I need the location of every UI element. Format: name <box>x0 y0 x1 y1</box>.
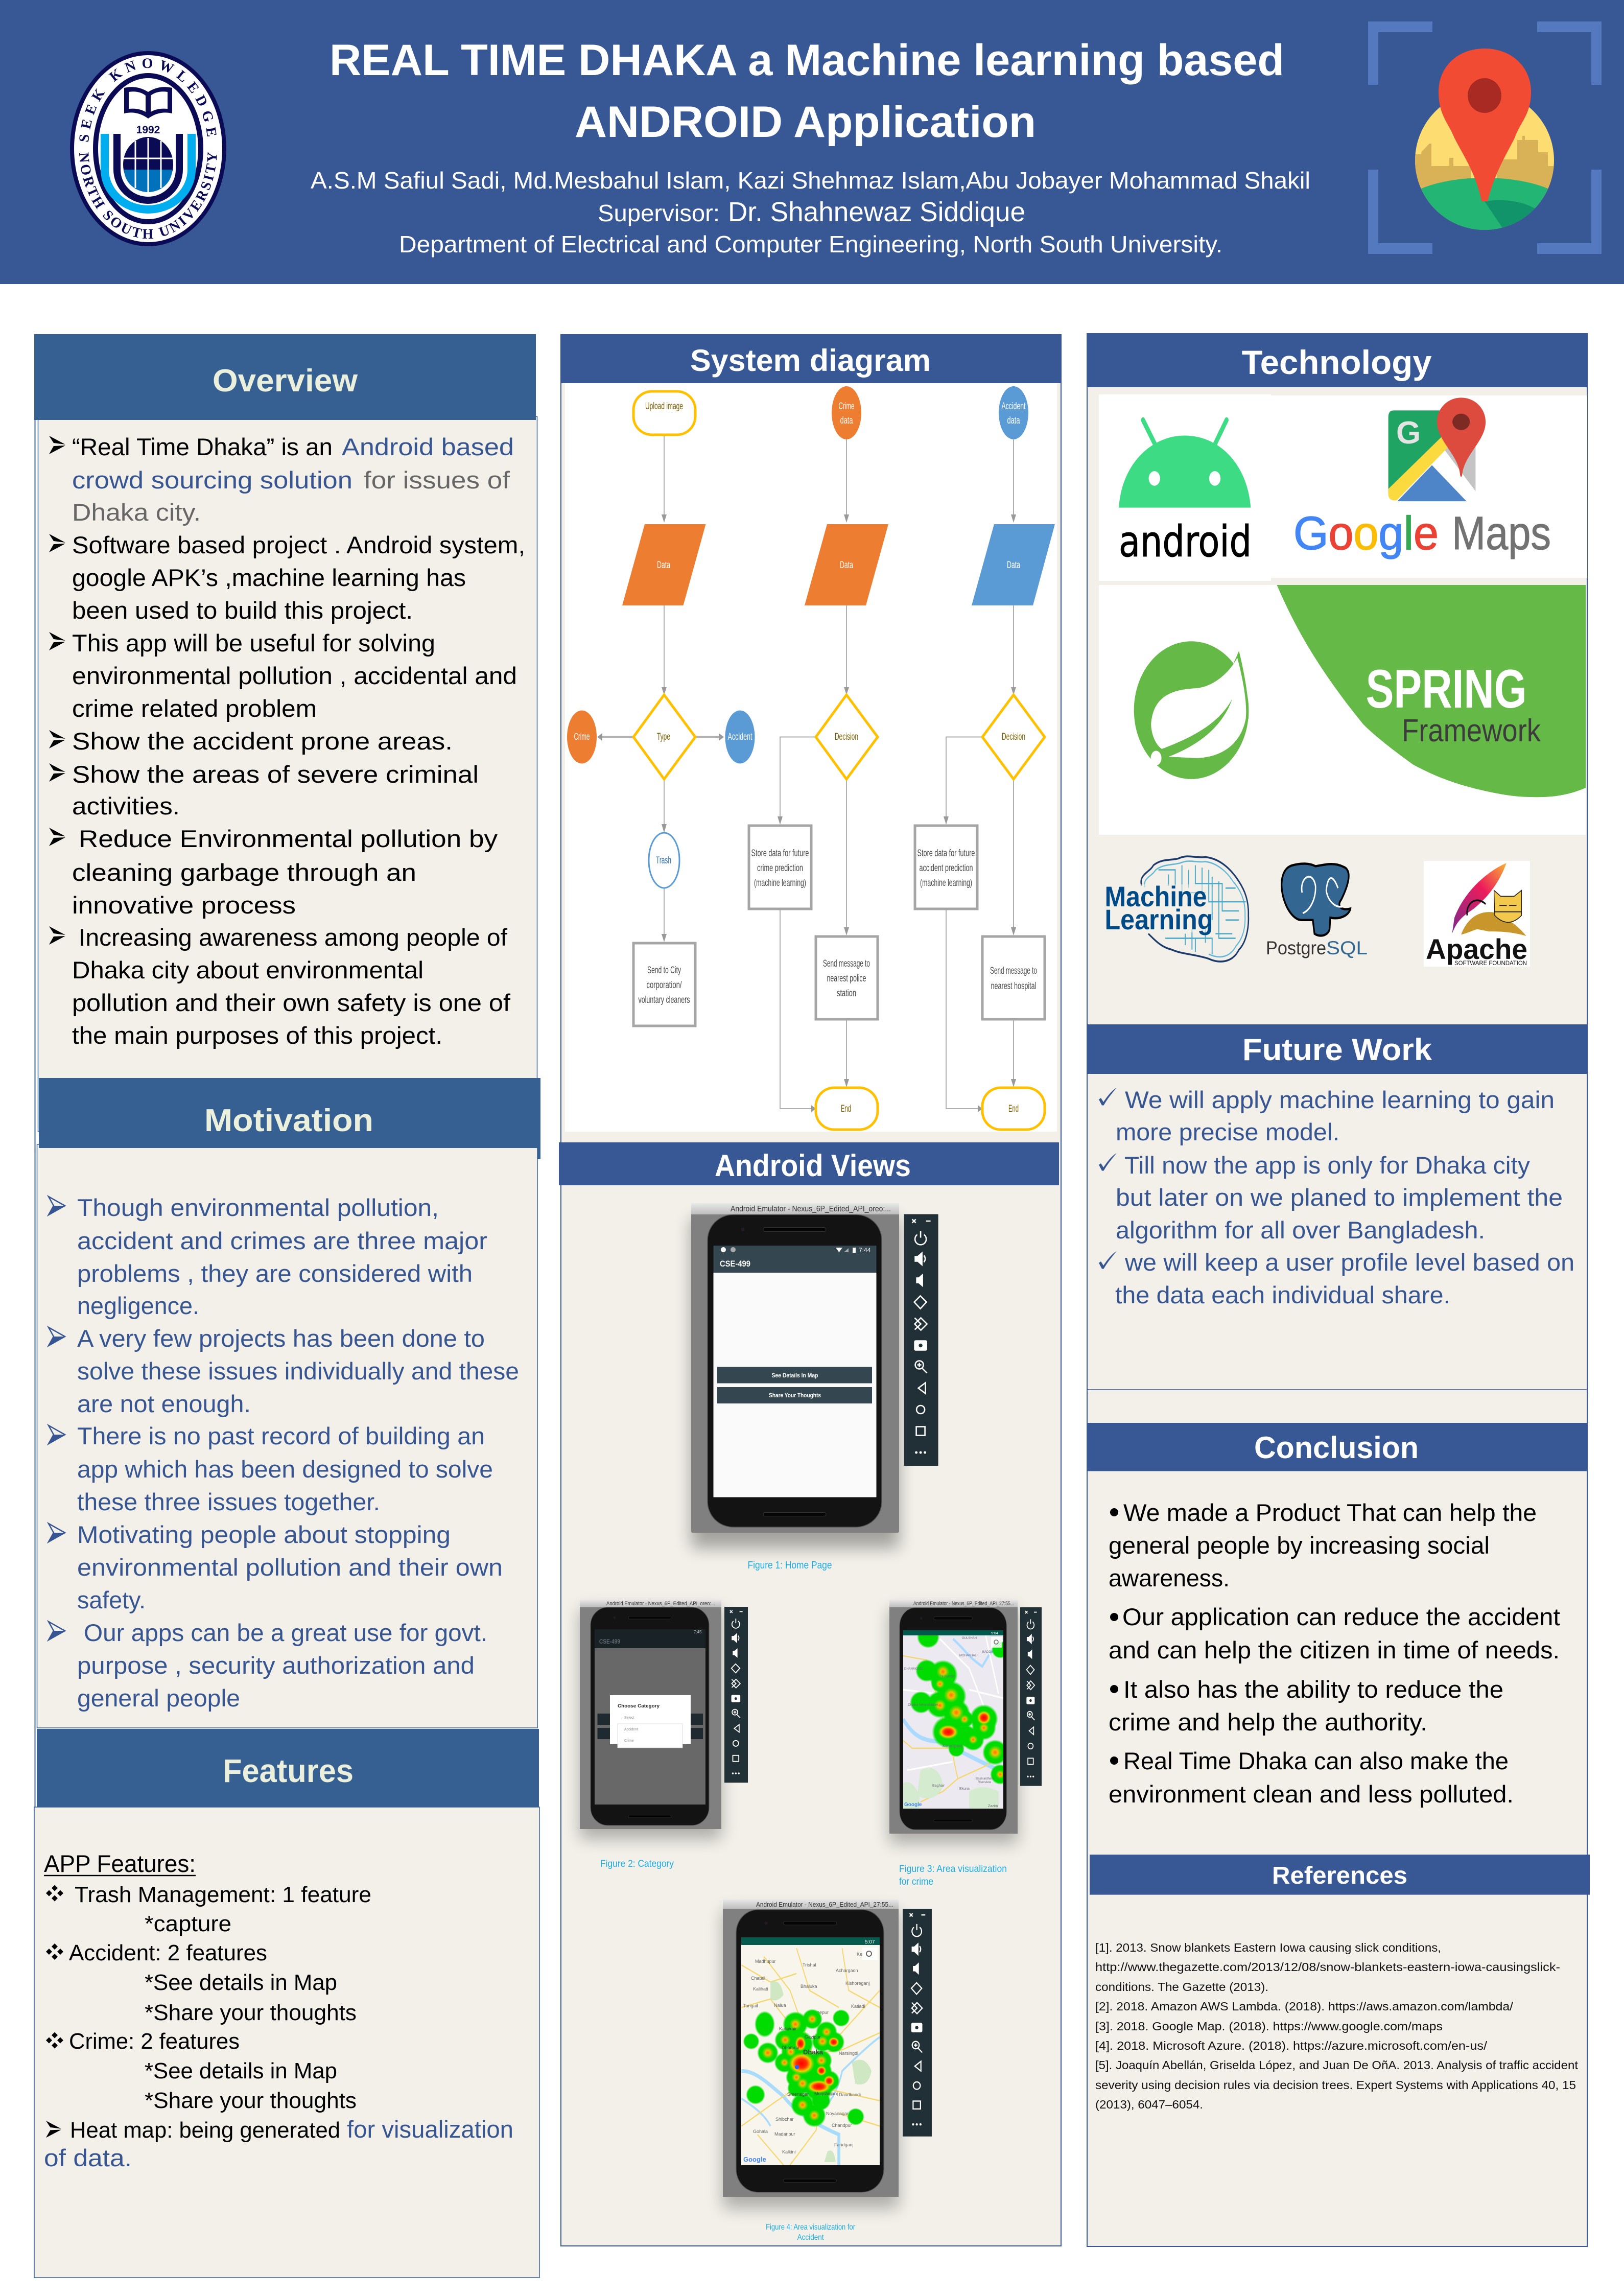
reference list: http://www.thegazette.com/2013/12/08/snow-blankets-eastern-iowa-causingslick- <box>1095 1960 1560 1974</box>
features list: Accident: 2 features <box>69 1940 267 1965</box>
logo: google maps <box>1271 395 1587 578</box>
flowchart process boxes: Send message to <box>823 958 870 969</box>
map: crime heat blobs: Baghair <box>932 1784 945 1788</box>
motivation bullet list: purpose , security authorization and <box>77 1652 475 1679</box>
flowchart node: accident: Accident <box>727 732 752 742</box>
future work list: the data each individual share. <box>1115 1281 1450 1308</box>
logo: google maps: G <box>1396 415 1421 451</box>
map: accident heat blobs: Trishal <box>803 1962 816 1967</box>
logo: google maps: Google <box>1293 507 1439 559</box>
logo: spring framework <box>1099 585 1586 835</box>
screenshot: home page: CSE-499 <box>720 1259 750 1269</box>
flowchart decisions: Type <box>657 732 670 742</box>
panel: overview <box>34 334 537 1807</box>
flowchart data nodes: Data <box>657 560 670 571</box>
reference list: [3]. 2018. Google Map. (2018). https://www.google.com/maps <box>1095 2020 1443 2033</box>
screenshot: home page: Share Your Thoughts <box>769 1392 821 1399</box>
map: crime heat blobs: Riverview <box>978 1781 992 1784</box>
icon: city map pin <box>1368 21 1602 254</box>
reference list: severity using decision rules via decision trees. Expert Systems with Applications 40, 15 <box>1095 2078 1576 2092</box>
heading: overview: Overview <box>213 363 358 399</box>
future work list: algorithm for all over Bangladesh. <box>1116 1216 1485 1244</box>
overview bullet list: activities. <box>72 792 180 819</box>
flowchart end nodes <box>816 1088 1045 1130</box>
features list: *See details in Map <box>145 1970 337 1995</box>
map: accident heat blobs: Tangail <box>743 2003 758 2008</box>
map: accident heat blobs: Munshiganj <box>814 2091 838 2096</box>
flowchart decisions <box>633 695 1045 779</box>
flowchart data nodes: Data <box>840 560 853 571</box>
logo: apache: Apache <box>1426 933 1527 965</box>
logo: postgresql: SQL <box>1326 938 1368 958</box>
motivation bullet list: solve these issues individually and these <box>77 1357 519 1385</box>
map: crime heat blobs: GULSHAN <box>962 1637 977 1640</box>
overview bullet list: Android based <box>342 433 514 460</box>
heading: future work: Future Work <box>1242 1033 1432 1067</box>
screenshot: category dialog: 7:45 <box>694 1630 702 1634</box>
title <box>329 36 1284 147</box>
flowchart data nodes: Data <box>1007 560 1020 571</box>
panel: references <box>1090 1855 1590 2111</box>
map: accident heat blobs: Katiadi <box>851 2004 865 2009</box>
motivation bullet list: There is no past record of building an <box>77 1422 485 1449</box>
map: crime heat blobs: BADDA <box>982 1651 993 1654</box>
map: accident heat blobs: Narsingdi <box>839 2051 858 2056</box>
flowchart node: crime <box>567 710 597 763</box>
conclusion text: It also has the ability to reduce the <box>1123 1676 1503 1703</box>
title: REAL TIME DHAKA a Machine learning based <box>329 36 1284 85</box>
authors and affiliation: Dr. Shahnewaz Siddique <box>728 197 1025 227</box>
features list: Trash Management: 1 feature <box>75 1882 371 1907</box>
overview bullet list: been used to build this project. <box>72 597 413 624</box>
logo: machine learning: Learning <box>1104 903 1213 935</box>
map: crime heat blobs: Google <box>904 1802 922 1808</box>
flowchart process boxes: nearest hospital <box>991 981 1036 992</box>
icon: university seal <box>70 51 226 246</box>
motivation bullet list: Though environmental pollution, <box>77 1194 439 1221</box>
motivation bullet list <box>49 1194 519 1712</box>
overview bullet list: Increasing awareness among people of <box>79 924 508 951</box>
features list: *Share your thoughts <box>145 2088 357 2113</box>
flowchart process boxes: (machine learning) <box>920 878 972 888</box>
screenshot: crime heat map <box>889 1600 1042 1843</box>
features list: for visualization <box>347 2116 513 2143</box>
future work list: we will keep a user profile level based on <box>1124 1249 1574 1276</box>
flowchart process boxes: Store data for future <box>917 848 975 859</box>
map: accident heat blobs: Gohala <box>753 2129 768 2134</box>
conclusion text: Our application can reduce the accident <box>1122 1603 1560 1630</box>
screenshot: home page <box>691 1203 938 1548</box>
map: accident heat blobs: Faridganj <box>834 2142 854 2147</box>
map: crime heat blobs: TEJGAON <box>940 1675 954 1678</box>
map: accident heat blobs: Sreepur <box>812 2010 829 2015</box>
conclusion text: We made a Product That can help the <box>1123 1499 1537 1526</box>
overview bullet list: crime related problem <box>72 695 317 722</box>
future work list: more precise model. <box>1116 1118 1339 1145</box>
screenshot: category dialog: Accident <box>624 1728 638 1731</box>
caption: figure 2: Figure 2: Category <box>600 1859 674 1869</box>
screenshot: accident heat map: Android Emulator - Nexus_6P_Edited_API_27:55... <box>756 1901 893 1908</box>
screenshot: category dialog: Crime <box>624 1739 634 1743</box>
flowchart process boxes: accident prediction <box>920 863 973 874</box>
panel: technology <box>1087 334 1587 2246</box>
heading: features: Features <box>223 1752 354 1789</box>
screenshot: category dialog: Android Emulator - Nexus_6P_Edited_API_oreo:... <box>606 1601 715 1607</box>
future work list: We will apply machine learning to gain <box>1125 1086 1555 1113</box>
panel: android views <box>559 1142 1059 2242</box>
flowchart process boxes: (machine learning) <box>754 878 806 888</box>
panel: system diagram <box>561 335 1061 2246</box>
reference list: [4]. 2018. Microsoft Azure. (2018). https://azure.microsoft.com/en-us/ <box>1095 2039 1488 2052</box>
heading: conclusion: Conclusion <box>1254 1431 1419 1465</box>
motivation bullet list: these three issues together. <box>77 1488 380 1515</box>
screenshot: accident heat map <box>723 1900 932 2208</box>
overview bullet list: cleaning garbage through an <box>72 859 416 886</box>
flowchart node: accident data: data <box>1007 415 1020 426</box>
authors and affiliation: Department of Electrical and Computer Engineering, North South University. <box>399 231 1222 257</box>
map: accident heat blobs: Nalua <box>774 2003 786 2008</box>
map: accident heat blobs: 5:07 <box>865 1939 875 1945</box>
map: accident heat blobs: Chandpur <box>832 2123 852 2128</box>
flowchart node: accident <box>725 710 755 763</box>
map: accident heat blobs: Daudkandi <box>839 2092 861 2097</box>
icon: university seal: SEEK KNOWLEDGE <box>79 58 217 142</box>
caption: figure 1: Figure 1: Home Page <box>748 1560 832 1571</box>
screenshot: home page: Android Emulator - Nexus_6P_Edited_API_oreo:... <box>731 1205 891 1213</box>
flowchart node: crime: Crime <box>574 732 590 742</box>
flowchart <box>565 383 1057 1132</box>
caption: figure 3: for crime <box>899 1877 933 1887</box>
header banner <box>0 0 1624 284</box>
map: accident heat blobs <box>741 1937 880 2165</box>
motivation bullet list: app which has been designed to solve <box>77 1456 493 1483</box>
reference list: [2]. 2018. Amazon AWS Lambda. (2018). https://aws.amazon.com/lambda/ <box>1095 2000 1514 2013</box>
heading: android views: Android Views <box>715 1149 911 1183</box>
caption: figure 4 <box>766 2223 856 2242</box>
overview bullet list: google APK’s ,machine learning has <box>72 564 466 591</box>
caption: figure 3 <box>899 1864 1007 1887</box>
map: accident heat blobs: Kaliakair <box>779 2026 797 2031</box>
reference list: (2013), 6047–6054. <box>1095 2098 1203 2111</box>
flowchart process boxes: voluntary cleaners <box>639 995 690 1005</box>
map: crime heat blobs: Bashundhara <box>976 1777 994 1780</box>
motivation bullet list: are not enough. <box>77 1390 251 1417</box>
heading: motivation: Motivation <box>204 1103 373 1138</box>
overview bullet list: Show the accident prone areas. <box>72 728 453 755</box>
heading: technology: Technology <box>1242 343 1432 381</box>
flowchart decisions: Decision <box>1002 732 1025 742</box>
overview bullet list: Dhaka city. <box>72 499 201 526</box>
overview bullet list: Reduce Environmental pollution by <box>79 825 498 852</box>
logo: android: android <box>1119 517 1252 567</box>
motivation bullet list: negligence. <box>77 1292 199 1319</box>
overview bullet list: “Real Time Dhaka” is an <box>72 433 333 460</box>
map: accident heat blobs: Noyanagar <box>826 2111 849 2116</box>
panel: features <box>34 1729 539 2278</box>
flowchart node: trash: Trash <box>656 855 671 866</box>
logo: spring framework: SPRING <box>1366 658 1527 719</box>
authors and affiliation: Supervisor: <box>598 200 720 226</box>
panel: conclusion <box>1087 1423 1587 1808</box>
motivation bullet list: environmental pollution and their own <box>77 1554 503 1581</box>
icon: university seal: NORTH SOUTH UNIVERSITY <box>79 152 217 239</box>
flowchart node: upload image <box>633 391 695 435</box>
conclusion text: general people by increasing social <box>1109 1532 1490 1559</box>
flowchart process boxes: Send to City <box>647 965 681 976</box>
flowchart process boxes: Store data for future <box>751 848 809 859</box>
overview bullet list: crowd sourcing solution <box>72 466 352 494</box>
screenshot: category dialog: Choose Category <box>618 1703 660 1708</box>
map: crime heat blobs: 5:04 <box>991 1632 998 1635</box>
screenshot: home page: See Details In Map <box>771 1372 818 1379</box>
motivation bullet list: accident and crimes are three major <box>77 1227 487 1254</box>
flowchart process boxes: crime prediction <box>757 863 803 874</box>
caption: figure 3: Figure 3: Area visualization <box>899 1864 1007 1875</box>
screenshot: category dialog: Select <box>624 1716 634 1720</box>
map: crime heat blobs: Dhaka New Market <box>908 1703 938 1707</box>
flowchart node: crime data <box>832 386 861 439</box>
motivation bullet list: Motivating people about stopping <box>77 1521 451 1548</box>
features list <box>44 1850 513 2171</box>
screenshot: home page: 7:44 <box>859 1247 871 1254</box>
reference list: [5]. Joaquín Abellán, Griselda López, and Juan De OñA. 2013. Analysis of traffic accident <box>1095 2058 1579 2072</box>
map: accident heat blobs: Dhamrai <box>782 2045 799 2050</box>
heading: references: References <box>1272 1862 1407 1889</box>
map: accident heat blobs: Ker <box>857 1952 864 1957</box>
flowchart decisions: Decision <box>835 732 858 742</box>
overview bullet list: This app will be useful for solving <box>72 629 435 657</box>
motivation bullet list: safety. <box>77 1586 146 1613</box>
motivation bullet list: general people <box>77 1684 240 1712</box>
reference list <box>1095 1941 1579 2111</box>
map: accident heat blobs: Bhaluka <box>801 1984 817 1989</box>
map: crime heat blobs: Keraniganj <box>943 1744 962 1748</box>
panel: future work <box>1087 1024 1587 1390</box>
motivation bullet list: A very few projects has been done to <box>77 1325 485 1352</box>
map: accident heat blobs: Sreenagar <box>787 2092 809 2097</box>
future work list <box>1099 1086 1574 1308</box>
map: accident heat blobs: Chatail <box>751 1976 765 1981</box>
screenshot: category dialog <box>580 1600 748 1839</box>
flowchart data nodes <box>622 524 1055 605</box>
overview bullet list: Software based project . Android system, <box>72 531 525 558</box>
conclusion text: crime and help the authority. <box>1109 1708 1427 1736</box>
authors and affiliation <box>311 167 1310 257</box>
flowchart process boxes <box>633 826 1045 1026</box>
map: accident heat blobs: Madaripur <box>774 2131 795 2137</box>
title: ANDROID Application <box>575 98 1036 147</box>
caption: figure 4: Figure 4: Area visualization for <box>766 2223 856 2232</box>
map: crime heat blobs: Ekuria <box>959 1787 970 1791</box>
motivation bullet list: Our apps can be a great use for govt. <box>84 1619 487 1646</box>
map: accident heat blobs: Achargaon <box>836 1968 858 1973</box>
logo: postgresql: Postgre <box>1266 938 1326 958</box>
panel: motivation <box>37 1078 540 1728</box>
future work list: Till now the app is only for Dhaka city <box>1124 1152 1531 1179</box>
logo: machine learning <box>1102 856 1249 962</box>
overview bullet list: for issues of <box>364 466 510 494</box>
authors and affiliation: A.S.M Safiul Sadi, Md.Mesbahul Islam, Kazi Shehmaz Islam,Abu Jobayer Mohammad Shakil <box>311 167 1310 194</box>
flowchart process boxes: Send message to <box>990 966 1037 976</box>
icon: university seal: 1992 <box>136 124 160 136</box>
logo: android <box>1099 394 1271 581</box>
conclusion text: awareness. <box>1109 1564 1230 1591</box>
overview bullet list: pollution and their own safety is one of <box>72 989 511 1016</box>
features list: *Share your thoughts <box>145 2000 357 2025</box>
overview bullet list: environmental pollution , accidental and <box>72 662 517 689</box>
logo: apache <box>1424 861 1530 967</box>
conclusion text: and can help the citizen in time of needs. <box>1109 1636 1560 1664</box>
overview bullet list: innovative process <box>72 892 296 919</box>
logo: machine learning: Machine <box>1104 880 1207 912</box>
map: crime heat blobs: MOHAKHALI <box>959 1654 978 1657</box>
flowchart node: upload image: Upload image <box>645 401 683 412</box>
features list: *See details in Map <box>145 2058 337 2083</box>
features list: Crime: 2 features <box>69 2029 240 2054</box>
heading: system diagram: System diagram <box>690 343 931 378</box>
map: crime heat blobs: DHANMONDI <box>904 1668 923 1671</box>
motivation bullet list: problems , they are considered with <box>77 1260 473 1287</box>
map: accident heat blobs: Dhaka <box>803 2048 823 2056</box>
future work list: but later on we planed to implement the <box>1116 1184 1563 1211</box>
logo: apache: SOFTWARE FOUNDATION <box>1454 959 1527 967</box>
flowchart node: accident data: Accident <box>1001 401 1026 412</box>
flowchart node: trash <box>649 833 679 888</box>
map: crime heat blobs: Zazira <box>988 1805 998 1808</box>
conclusion text: Real Time Dhaka can also make the <box>1123 1747 1509 1774</box>
flowchart process boxes: station <box>837 988 856 999</box>
map: accident heat blobs: Gazipur <box>805 2034 821 2040</box>
flowchart node: crime data: data <box>840 415 853 426</box>
overview bullet list: the main purposes of this project. <box>72 1022 442 1049</box>
conclusion text <box>1109 1499 1560 1808</box>
reference list: conditions. The Gazette (2013). <box>1095 1980 1268 1994</box>
map: accident heat blobs: Shibchar <box>775 2117 794 2122</box>
features list: *capture <box>145 1911 231 1936</box>
map: accident heat blobs: Kalihati <box>753 1986 768 1992</box>
map: accident heat blobs: Madhupur <box>755 1959 776 1964</box>
flowchart node: accident data <box>999 386 1028 439</box>
reference list: [1]. 2013. Snow blankets Eastern Iowa causing slick conditions, <box>1095 1941 1441 1954</box>
flowchart process boxes: nearest police <box>827 973 866 984</box>
map: accident heat blobs: Kishoreganj <box>845 1981 870 1986</box>
screenshot: category dialog: CSE-499 <box>599 1638 620 1645</box>
features list: APP Features: <box>44 1850 196 1877</box>
features list: Heat map: being generated <box>70 2118 340 2143</box>
conclusion text: environment clean and less polluted. <box>1109 1780 1514 1808</box>
logo: spring framework: Framework <box>1402 713 1541 748</box>
overview bullet list: Show the areas of severe criminal <box>72 761 479 788</box>
flowchart end nodes: End <box>1008 1104 1019 1114</box>
screenshot: crime heat map: Android Emulator - Nexus_6P_Edited_API_27:55... <box>913 1601 1014 1607</box>
map: accident heat blobs: Kalkini <box>782 2149 796 2154</box>
map: accident heat blobs: Google <box>743 2156 766 2163</box>
flowchart end nodes: End <box>841 1104 851 1114</box>
flowchart node: crime data: Crime <box>839 401 854 412</box>
caption: figure 4: Accident <box>797 2233 824 2242</box>
overview bullet list: Dhaka city about environmental <box>72 956 423 983</box>
features list: of data. <box>44 2144 132 2171</box>
logo: postgresql <box>1266 863 1368 958</box>
logo: google maps: Maps <box>1452 507 1551 559</box>
map: crime heat blobs <box>903 1626 1010 1808</box>
overview bullet list <box>49 433 525 1049</box>
flowchart process boxes: corporation/ <box>647 980 682 991</box>
